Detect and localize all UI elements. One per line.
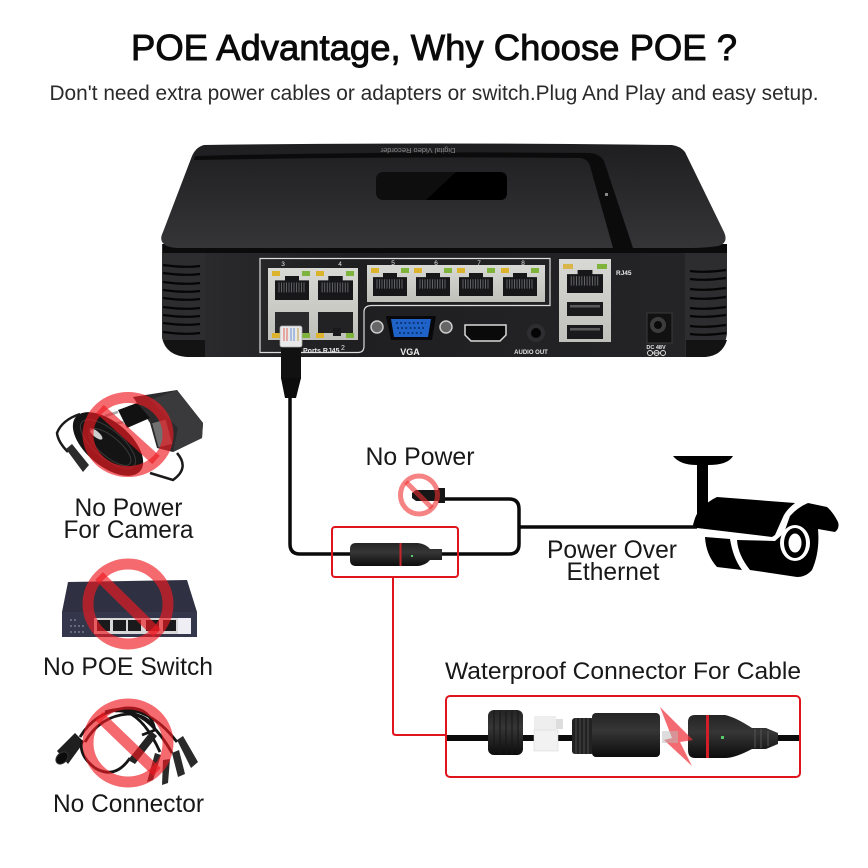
red leader line [393,577,446,735]
lid [161,144,726,248]
lid groove and stripe [194,152,633,248]
DC jack [647,313,672,343]
subtitle: Don't need extra power cables or adapters or switch.Plug And Play and easy setup. [50,82,818,105]
port numbers: 3 [281,261,285,268]
red bolt [660,707,693,766]
RJ45 plug [280,326,302,398]
port frame [260,258,550,352]
right LAN and USB stack [559,259,611,342]
brand mirror text: Digital Video Recorder [380,146,455,155]
DC label: DC 48V [646,345,666,351]
audio label: AUDIO OUT [514,350,548,356]
no power plug with prohibition [400,476,445,514]
DC polarity symbols [648,350,666,356]
back panel [205,253,685,357]
under-lid shadow band [163,244,727,253]
adapter photo [57,390,203,488]
power over ethernet label: Ethernet [566,558,660,586]
POE ports 1-4 [268,268,358,340]
port numbers: 6 [434,260,438,267]
title: POE Advantage, Why Choose POE ? [131,27,737,68]
port numbers: 8 [521,260,525,267]
RJ45 label: RJ45 [616,270,632,277]
POE connector highlighted [332,527,458,577]
no power label: No Power [74,494,182,522]
power over ethernet label: Power Over [547,536,677,564]
port numbers: 5 [391,260,395,267]
prohibition sign [88,564,168,644]
no POE switch label: No POE Switch [43,653,213,681]
POE ports 5-8 [367,265,545,302]
coupling body [688,715,778,758]
prohibition sign [88,704,168,782]
splitter photo [54,708,198,785]
ports label: Ports RJ45 [303,348,340,355]
port numbers: 4 [338,261,342,268]
NVR recorder [161,144,727,357]
no power adapter [57,390,203,488]
VGA label: VGA [400,347,420,357]
audio jack [527,324,545,342]
switch photo [62,580,197,637]
prohibition sign [88,398,168,472]
white seal [534,716,563,751]
waterproof heading: Waterproof Connector For Cable [445,658,801,685]
camera icon [673,456,839,577]
lid window [376,172,507,200]
cap nut [488,710,523,755]
no POE switch [62,564,197,644]
for camera label: For Camera [64,516,194,544]
threaded body [572,713,660,757]
VGA port [371,316,452,340]
waterproof connector panel [446,696,800,777]
cable route [290,395,697,554]
side fins [162,244,727,357]
no power label: No Power [366,443,474,471]
no connector [54,704,198,785]
number 2 label: 2 [341,345,345,352]
no connector label: No Connector [53,790,204,818]
HDMI port [465,325,506,341]
port numbers: 7 [477,260,481,267]
port numbers [281,260,525,268]
